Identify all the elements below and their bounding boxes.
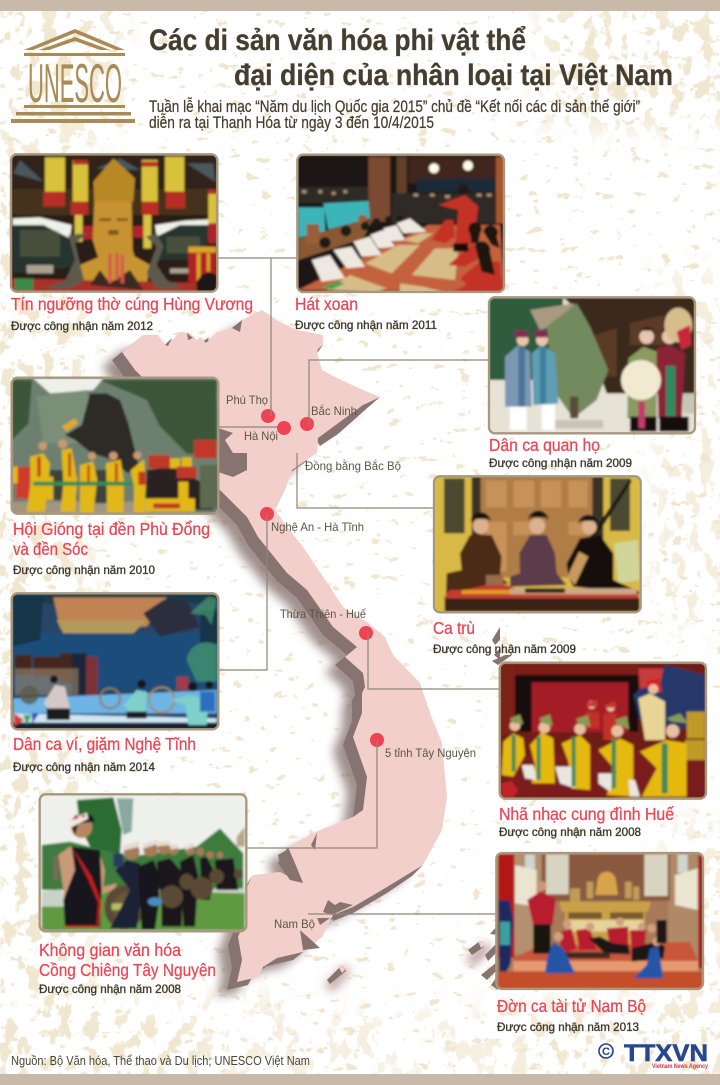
text: UNESCO xyxy=(28,52,122,114)
recognition year: Được công nhận năm 2008 xyxy=(499,825,641,839)
map labels: Nghệ An - Hà Tĩnh xyxy=(271,520,364,534)
map labels xyxy=(226,393,476,931)
TTXVN logo: C xyxy=(602,1046,610,1058)
panel: Hùng Vương xyxy=(11,154,253,333)
map labels: 5 tỉnh Tây Nguyên xyxy=(385,746,476,760)
subtitle xyxy=(149,97,640,132)
heading xyxy=(39,940,216,980)
heading: Ca trù xyxy=(433,618,475,638)
heading: Dân ca quan họ xyxy=(489,435,600,455)
connector lines xyxy=(217,258,499,914)
panel: Nhã nhạc xyxy=(499,663,706,839)
recognition year: Được công nhận năm 2008 xyxy=(39,982,181,996)
heading xyxy=(13,519,210,559)
title: Các di sản văn hóa phi vật thể xyxy=(149,24,526,57)
map labels: Phú Thọ xyxy=(226,393,268,407)
recognition year: Được công nhận năm 2009 xyxy=(433,642,576,656)
heading: và đền Sóc xyxy=(13,539,88,559)
photo: quan họ singers xyxy=(489,297,695,433)
recognition year: Được công nhận năm 2012 xyxy=(11,319,153,333)
map labels: Hà Nội xyxy=(244,429,278,443)
title: đại diện của nhân loại tại Việt Nam xyxy=(234,59,673,92)
panel: Dân ca quan họ xyxy=(489,297,695,470)
panel: Dân ca ví, giặm xyxy=(12,593,218,774)
heading: Đờn ca tài tử Nam Bộ xyxy=(497,996,646,1016)
recognition year: Được công nhận năm 2009 xyxy=(489,456,632,470)
panel: Cồng Chiêng xyxy=(39,794,246,996)
heading: Nhã nhạc cung đình Huế xyxy=(499,804,674,824)
photo: Gióng festival xyxy=(12,378,218,514)
heading: Hát xoan xyxy=(295,294,358,314)
heading: Dân ca ví, giặm Nghệ Tĩnh xyxy=(13,734,196,754)
UNESCO logo xyxy=(11,29,135,123)
photo: gong players xyxy=(40,794,246,931)
TTXVN logo: TTXVN xyxy=(624,1040,708,1067)
recognition year: Được công nhận năm 2014 xyxy=(13,760,155,774)
map labels: Nam Bộ xyxy=(274,917,315,931)
photo: ca trù performers xyxy=(434,476,641,612)
map labels: Bắc Ninh xyxy=(311,403,357,418)
panel: Hát xoan xyxy=(295,155,504,332)
panel: Hội Gióng xyxy=(12,378,218,577)
panel: Đờn ca tài tử xyxy=(496,853,703,1034)
heading: Cồng Chiêng Tây Nguyên xyxy=(39,960,216,980)
islands xyxy=(325,627,512,992)
photo: singers in a hall xyxy=(297,155,504,292)
TTXVN logo: Vietnam News Agency xyxy=(652,1064,709,1070)
heading: Tín ngưỡng thờ cúng Hùng Vương xyxy=(11,294,253,314)
heading: Hội Gióng tại đền Phù Đổng xyxy=(13,519,210,539)
map labels: Thừa Thiên - Huế xyxy=(280,607,366,621)
TTXVN logo xyxy=(599,1040,709,1070)
photo: stage performance xyxy=(12,593,218,729)
map of Vietnam xyxy=(102,310,512,997)
recognition year: Được công nhận năm 2011 xyxy=(295,318,437,332)
map labels: Đồng bằng Bắc Bộ xyxy=(305,458,401,473)
recognition year: Được công nhận năm 2013 xyxy=(497,1020,639,1034)
photo: golden statue xyxy=(11,154,217,292)
photo: court music dancers xyxy=(500,663,706,799)
title xyxy=(149,24,673,92)
photo: musicians at an altar xyxy=(496,853,703,989)
heading: Không gian văn hóa xyxy=(39,940,181,960)
map pins xyxy=(260,405,384,747)
source note: Nguồn: Bộ Văn hóa, Thể thao và Du lịch; UNESCO Việt Nam xyxy=(11,1053,310,1068)
panel: Ca trù xyxy=(433,476,641,656)
subtitle: diễn ra tại Thanh Hóa từ ngày 3 đến 10/4/2015 xyxy=(149,113,434,132)
recognition year: Được công nhận năm 2010 xyxy=(13,563,155,577)
